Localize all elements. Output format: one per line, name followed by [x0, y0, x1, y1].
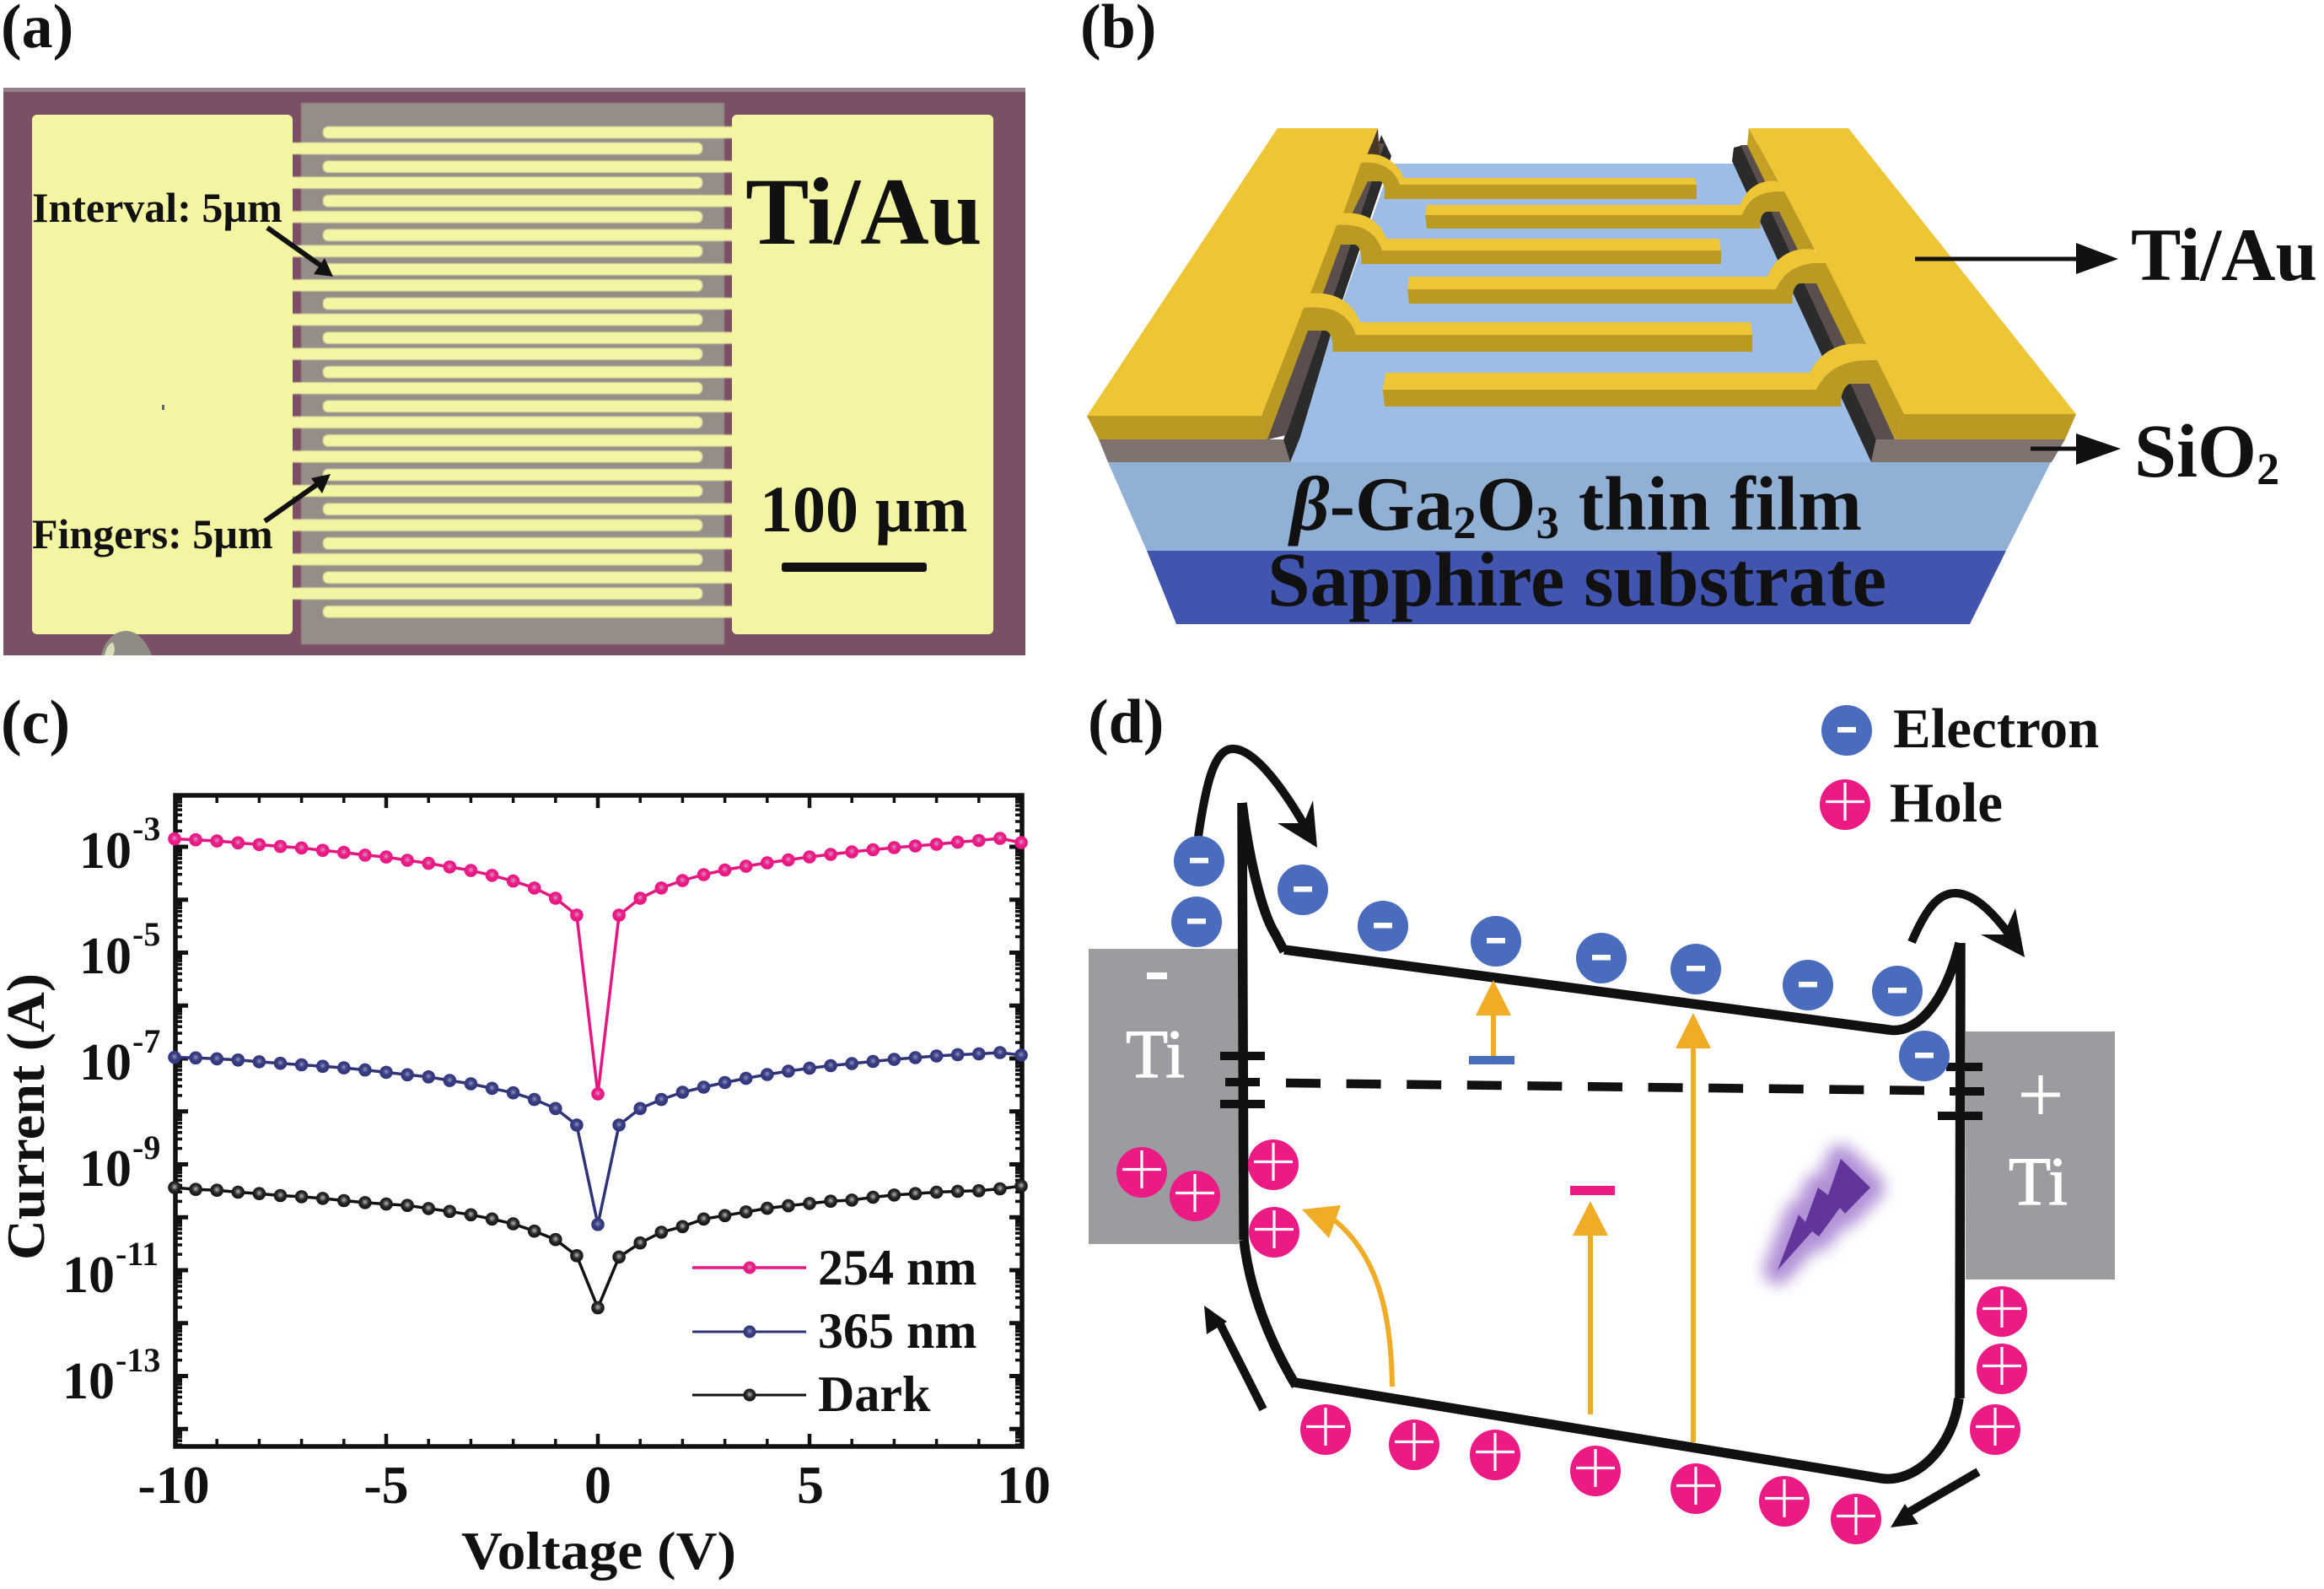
- axis ticks: [175, 795, 1022, 1466]
- label: (d): (d): [1088, 687, 1164, 757]
- arrow: holes lower right: [1891, 1472, 1978, 1527]
- electrons: [1171, 836, 1950, 1081]
- y axis tick labels: [62, 810, 160, 1410]
- legend: hole: Hole: [1890, 772, 2003, 834]
- series: 254 nm: [175, 838, 1021, 1094]
- text: Interval: Interval: 5µm: [32, 184, 282, 231]
- plot frame: [175, 795, 1022, 1446]
- right Ti electrode: Ti: [2009, 1143, 2068, 1220]
- x axis tick labels: 10: [997, 1455, 1051, 1515]
- panel c: I-V chart: [0, 795, 1051, 1581]
- debris: [101, 631, 152, 655]
- series: 365 nm: [175, 1053, 1021, 1225]
- left finger 3: [1262, 294, 1752, 439]
- arrow: interval: [267, 228, 333, 277]
- legend: 365 nm: 365 nm: [818, 1303, 976, 1359]
- legend: 365 nm: [692, 1303, 976, 1359]
- arrow: Ti/Au: [1915, 243, 2118, 274]
- x axis tick labels: -5: [363, 1455, 409, 1515]
- y axis tick labels: 10: [62, 1247, 115, 1304]
- left Ti/Au pad: [1087, 128, 1378, 439]
- left finger 2: [1310, 213, 1721, 295]
- text: Ti/Au: Ti/Au: [745, 159, 982, 265]
- arrow: electrons over right barrier: [1912, 893, 2025, 957]
- x axis title: Voltage (V): [461, 1522, 736, 1581]
- legend: [692, 1240, 976, 1422]
- film label: β-Ga: [1290, 461, 1453, 547]
- y axis tick labels: 10: [79, 928, 132, 985]
- arrow: fingers: [265, 474, 331, 521]
- y axis tick labels: -7: [132, 1022, 160, 1060]
- band edges: [1242, 803, 1961, 1479]
- scale bar: [782, 563, 927, 572]
- substrate label: Sapphire substrate: [1267, 537, 1886, 622]
- film front face: [1108, 462, 2051, 551]
- icon: lightning bolt: [1778, 1159, 1870, 1270]
- left finger 1: [1343, 154, 1697, 216]
- y axis tick labels: -9: [132, 1128, 160, 1166]
- right contact pad: [732, 115, 993, 634]
- y axis tick labels: 10: [79, 1140, 132, 1198]
- film label: thin film: [1559, 461, 1862, 547]
- sapphire front face: [1147, 551, 2006, 624]
- left SiO2 wall: [1099, 135, 1391, 462]
- label: (c): (c): [1, 688, 70, 757]
- label: Ti/Au: Ti/Au: [2131, 214, 2317, 297]
- right finger 3: [1383, 343, 1904, 439]
- legend: hole: [1820, 772, 2003, 834]
- y axis tick labels: 10: [79, 822, 132, 880]
- y axis tick labels: 10: [79, 1034, 132, 1091]
- interface states left: [1220, 1056, 1265, 1104]
- y axis tick labels: 10: [62, 1353, 115, 1410]
- legend: electron: Electron: [1893, 698, 2099, 760]
- left Ti electrode: Ti: [1126, 1015, 1185, 1092]
- arrow: SiO2: [2031, 434, 2121, 465]
- panel b: device schematic: [1087, 128, 2317, 624]
- text: Fingers: Fingers: 5µm: [32, 510, 273, 557]
- trap level excitation arrow: [1469, 980, 1514, 1064]
- legend: Dark: Dark: [818, 1366, 931, 1422]
- y axis tick labels: -5: [132, 915, 160, 953]
- right Ti/Au pad: [1749, 128, 2076, 439]
- holes: [1116, 1139, 2027, 1544]
- substrate background: [3, 88, 1025, 655]
- fingers from right pad: [323, 127, 743, 617]
- film label: O: [1477, 461, 1536, 547]
- label: SiO2: 2: [2257, 444, 2279, 494]
- y axis tick labels: -11: [116, 1235, 159, 1273]
- legend: 254 nm: [692, 1240, 976, 1295]
- grey gap region: [301, 103, 724, 644]
- legend: Dark: [692, 1366, 931, 1422]
- interface states right: [1938, 1067, 1984, 1116]
- conduction band: [1242, 803, 1960, 1031]
- arrow: electrons over left barrier: [1198, 749, 1317, 848]
- y axis tick labels: -3: [132, 810, 160, 848]
- x axis tick labels: -10: [137, 1455, 210, 1515]
- curved orange arrow: [1302, 1205, 1392, 1387]
- film top surface: [1286, 164, 1876, 462]
- right finger 1: [1425, 181, 1815, 250]
- right Ti electrode: [1966, 1032, 2115, 1279]
- left Ti electrode: [1089, 949, 1239, 1244]
- label: SiO2: SiO: [2134, 410, 2257, 493]
- panel d: band diagram: [1089, 698, 2115, 1544]
- x axis tick labels: [137, 1455, 1051, 1515]
- valence band: [1244, 1240, 1959, 1479]
- right SiO2 wall: [1732, 145, 2065, 462]
- x axis tick labels: 0: [584, 1455, 611, 1515]
- Fermi level: [1286, 1083, 1924, 1091]
- film label: 3: [1536, 497, 1559, 548]
- text: scale: 100 µm: [760, 472, 967, 546]
- x axis tick labels: 5: [797, 1455, 824, 1515]
- right finger 2: [1407, 249, 1866, 346]
- panel a: optical micrograph of interdigital electrodes: [3, 88, 1025, 655]
- left contact pad: [32, 115, 293, 634]
- fingers from left pad: [282, 143, 702, 600]
- legend: 254 nm: 254 nm: [818, 1240, 976, 1295]
- arrow: holes lower left: [1204, 1306, 1263, 1409]
- valence-to-trap arrow: [1570, 1186, 1615, 1414]
- y axis tick labels: -13: [116, 1341, 160, 1379]
- band-to-band excitation arrow: [1676, 1013, 1711, 1442]
- left vertical band edge: [1242, 803, 1244, 1240]
- right vertical band edge: [1960, 943, 1961, 1398]
- series: Dark: [175, 1186, 1021, 1308]
- film label: 2: [1453, 497, 1477, 548]
